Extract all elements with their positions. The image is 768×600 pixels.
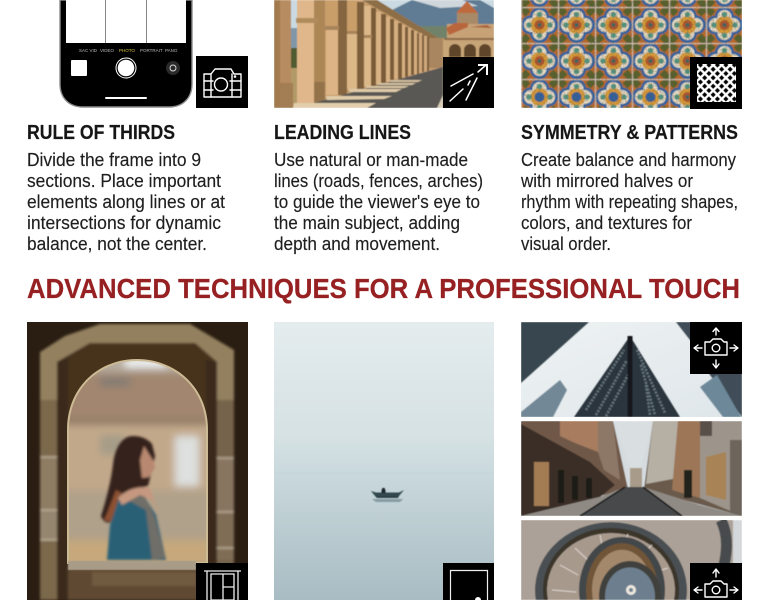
text: rule of thirds description: balance, not the center. xyxy=(27,234,207,254)
arcade wall xyxy=(324,0,439,100)
text: leading lines description: to guide the viewer's eye to xyxy=(274,192,480,212)
panel: leading lines xyxy=(274,0,494,254)
woman figure xyxy=(101,436,166,560)
text: leading lines description: depth and movement. xyxy=(274,234,440,254)
foreground pillar xyxy=(279,0,292,84)
right buildings xyxy=(644,422,731,514)
photo: lone boat on still water xyxy=(274,322,494,600)
text: symmetry description: rhythm with repeating shapes, xyxy=(521,192,738,212)
text: rule of thirds description: elements along lines or at xyxy=(27,192,225,212)
heading: symmetry and patterns: SYMMETRY & PATTERNS xyxy=(521,121,738,144)
text: rule of thirds description: sections. Place important xyxy=(27,171,221,191)
photo: phone camera xyxy=(60,0,192,107)
text: rule of thirds description: Divide the frame into 9 xyxy=(27,150,201,170)
text: symmetry description: Create balance and harmony xyxy=(521,150,736,170)
photo: phone camera: PORTRAIT xyxy=(140,48,163,53)
ground xyxy=(315,66,443,108)
text: symmetry description: with mirrored halves or xyxy=(520,171,693,191)
panel: rule of thirds xyxy=(27,0,248,254)
photo: spiral staircase xyxy=(521,520,742,600)
icon: camera with four arrows xyxy=(690,322,742,374)
panel: symmetry and patterns xyxy=(520,0,742,254)
icon: window frame xyxy=(196,563,248,600)
photo: mosaic tiles xyxy=(521,0,742,108)
text: symmetry description xyxy=(520,150,738,254)
icon: camera with arrows xyxy=(690,563,742,600)
left buildings xyxy=(521,421,628,496)
panel: natural framing xyxy=(27,322,248,600)
icon: diamond pattern xyxy=(690,57,742,109)
text: leading lines description: Use natural or man-made xyxy=(274,150,468,170)
panel: negative space xyxy=(274,322,494,600)
photo: phone camera: SAC VID xyxy=(79,48,98,53)
photo: phone camera: PANO xyxy=(165,48,178,53)
photo: city street xyxy=(521,421,742,516)
icon: converging arrows xyxy=(443,57,494,108)
sky and road xyxy=(613,421,653,468)
photo: woman in stone window xyxy=(27,322,248,600)
pillars xyxy=(296,0,443,103)
text: rule of thirds description: intersections for dynamic xyxy=(27,213,221,233)
photo: phone camera: VIDEO xyxy=(100,48,115,53)
text: leading lines description xyxy=(274,150,483,254)
text: leading lines description: lines (roads, fences, arches) xyxy=(274,171,483,191)
icon: camera with grid xyxy=(196,56,248,108)
photo: arcade xyxy=(274,0,494,108)
heading: leading lines: LEADING LINES xyxy=(274,121,411,144)
text: rule of thirds description xyxy=(27,150,225,254)
text: leading lines description: the main subject, adding xyxy=(274,213,460,233)
photo: skyscraper from below xyxy=(521,322,742,417)
panel: point of view xyxy=(521,322,742,600)
church xyxy=(442,60,443,108)
text: symmetry description: visual order. xyxy=(521,234,611,254)
heading: rule of thirds: RULE OF THIRDS xyxy=(27,121,175,144)
photo: phone camera: PHOTO xyxy=(119,48,135,53)
icon: empty frame with dot xyxy=(443,563,494,600)
text: symmetry description: colors, and textures for xyxy=(521,213,692,233)
